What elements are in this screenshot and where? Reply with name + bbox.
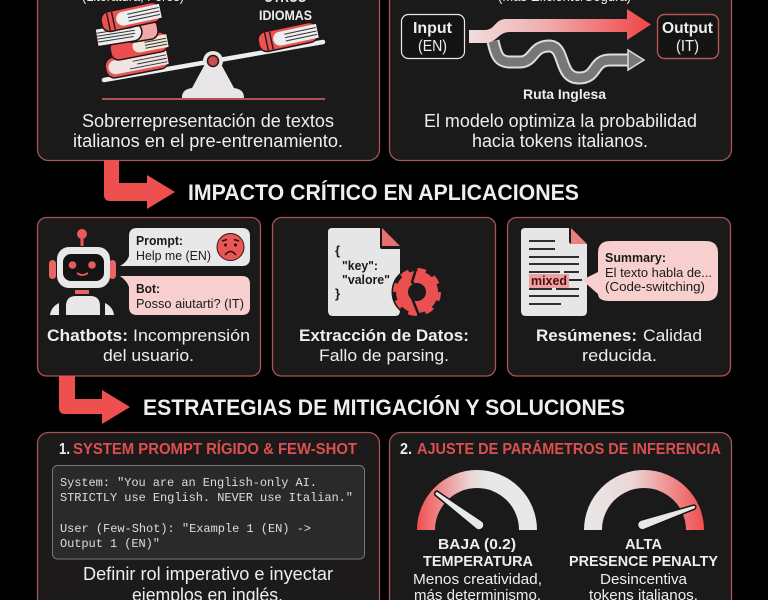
code block: Output 1 (EN)" [60,537,160,551]
caption: Fallo de parsing. [319,346,449,365]
box: output [658,14,718,58]
icon: json document: "valore" [342,273,390,287]
caption: El modelo optimiza la probabilidad [424,111,697,131]
icon: balance with books [95,1,325,100]
caption: Resúmenes: [536,326,637,345]
box: output: (IT) [676,38,699,55]
bubble: prompt: Help me (EN) [136,249,211,263]
code block: User (Few-Shot): "Example 1 (EN) -> [60,522,311,536]
bubble: summary: Summary: [605,251,666,265]
bubble: summary: El texto habla de... [605,266,712,280]
panel title: SYSTEM PROMPT RÍGIDO & FEW-SHOT [73,441,358,458]
label: otros idiomas: IDIOMAS [259,8,312,23]
caption: Incomprensión [133,326,250,345]
code block: STRICTLY use English. NEVER use Italian." [60,491,353,505]
bubble: summary [582,241,718,301]
panel title: 2. [400,441,412,458]
arrow: italian route [469,9,651,43]
bubble: prompt [120,228,250,266]
panel: resúmenes [508,218,730,376]
box: output: Output [662,20,713,37]
icon: json document: { [335,243,340,258]
gauge: temperatura [417,470,537,530]
caption [424,111,697,151]
label: presence penalty: Desincentiva [600,571,688,588]
arrow: to mitigation section [59,376,130,424]
icon: summary document [521,228,587,316]
label: temperatura: Menos creatividad, [413,571,542,588]
panel: sobrerrepresentación [38,0,380,160]
label: presence penalty: ALTA [625,536,662,553]
label: temperatura: TEMPERATURA [423,553,533,570]
code block [52,466,364,559]
caption: Definir rol imperativo e inyectar [83,564,333,584]
panel: rutas de probabilidad [390,0,732,160]
icon: json document: } [335,286,340,301]
arrow: to impact section [104,160,175,209]
icon: json document [328,228,400,316]
fulcrum [182,64,244,98]
bubble: summary: (Code-switching) [605,280,705,294]
icon: summary document: mixed [531,274,567,288]
panel: system prompt [38,432,380,600]
panel title: 1. [59,441,70,458]
box: input: Input [413,20,452,37]
icon: sad face [217,234,244,260]
panel title: AJUSTE DE PARÁMETROS DE INFERENCIA [417,441,721,458]
panel: parámetros de inferencia [390,432,732,600]
label: presence penalty [569,536,718,600]
bubble: bot [120,276,250,315]
label: otros idiomas [259,0,312,23]
caption [73,111,343,151]
icon: broken gear [396,266,438,318]
icon: robot [49,229,116,315]
bubble: prompt: Prompt: [136,234,183,248]
heading: estrategias de mitigación: ESTRATEGIAS DE MITIGACIÓN Y SOLUCIONES [143,395,625,420]
single book [257,21,319,53]
caption: italianos en el pre-entrenamiento. [73,131,343,151]
beam [104,42,323,80]
caption [47,326,250,365]
panel: extracción de datos [272,218,496,376]
panel: chatbots [38,218,260,376]
icon: json document: "key": [342,259,378,273]
caption: Sobrerrepresentación de textos [82,111,334,131]
label: ruta inglesa: Ruta Inglesa [523,86,606,102]
bubble: bot: Bot: [136,282,160,296]
label: temperatura: BAJA (0.2) [438,536,516,553]
caption: Extracción de Datos: [299,326,469,345]
box: input [402,14,464,58]
caption [536,326,702,365]
caption [83,564,333,600]
ground line [102,98,325,100]
caption: reducida. [582,346,657,365]
code block: System: "You are an English-only AI. [60,476,317,490]
label: temperatura [413,536,542,600]
caption: hacia tokens italianos. [472,131,648,151]
box: input: (EN) [418,38,447,55]
caption [299,326,469,365]
heading: impacto crítico: IMPACTO CRÍTICO EN APLICACIONES [188,180,579,205]
book stack [95,1,170,79]
arrow: english route [493,41,644,78]
bubble: bot: Posso aiutarti? (IT) [136,297,244,311]
caption: del usuario. [103,346,194,365]
gauge: presence penalty [584,470,704,530]
label: presence penalty: PRESENCE PENALTY [569,553,718,570]
caption: Calidad [643,326,702,345]
caption: Chatbots: [47,326,128,345]
